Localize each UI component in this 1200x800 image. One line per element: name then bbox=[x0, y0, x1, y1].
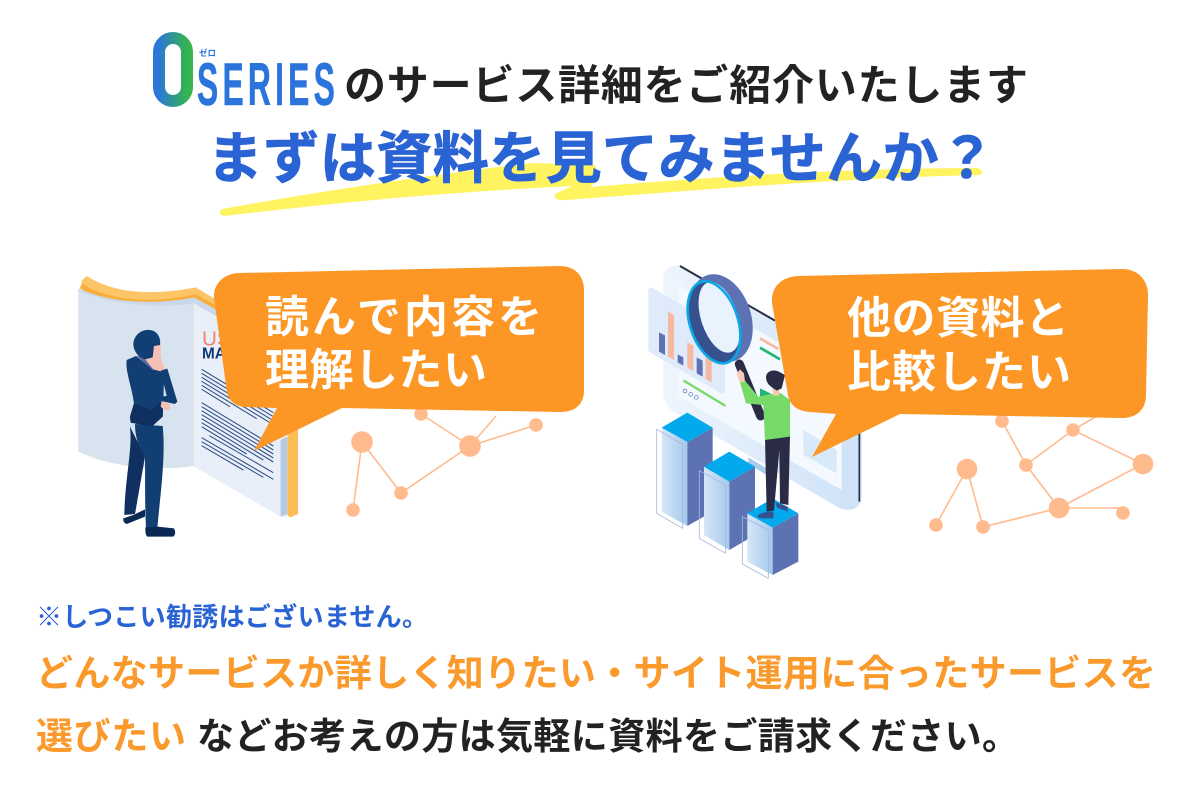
illustration: person reading a book: US bbox=[202, 327, 231, 350]
illustration: person with magnifying glass bbox=[648, 265, 1152, 578]
book text lines bbox=[202, 369, 273, 479]
callout: left: 読んで内容を bbox=[265, 293, 542, 342]
column 3 bbox=[747, 513, 773, 575]
heading highlight stroke bbox=[220, 163, 982, 216]
man bbox=[124, 427, 145, 515]
column 1 bbox=[662, 428, 687, 526]
body text: などお考えの方は気軽に資料をご請求ください。 bbox=[197, 716, 1019, 757]
network: left bbox=[347, 408, 542, 516]
logo: 0 SERIES bbox=[159, 38, 339, 119]
illustration: person reading a book bbox=[78, 276, 542, 537]
book bbox=[82, 276, 298, 517]
callout: right: 比較したい bbox=[847, 348, 1071, 397]
person bbox=[765, 436, 790, 512]
heading: まずは資料を見てみませんか？ bbox=[207, 127, 995, 190]
column 2 bbox=[704, 467, 729, 550]
title line: のサービス詳細をご紹介いたします bbox=[344, 62, 1028, 109]
body text: どんなサービスか詳しく知りたい・サイト運用に合ったサービスを bbox=[36, 653, 1156, 694]
magnifier bbox=[739, 364, 761, 416]
monitor bbox=[663, 265, 862, 510]
callout: left: 理解したい bbox=[265, 346, 487, 395]
network: right bbox=[930, 396, 1152, 533]
chart panel bbox=[648, 288, 725, 394]
body text: 選びたい bbox=[36, 716, 186, 757]
note: ※しつこい勧誘はございません。 bbox=[36, 602, 428, 632]
illustration: person reading a book: MAN bbox=[202, 346, 237, 363]
callout: right: 他の資料と bbox=[847, 294, 1069, 343]
body text bbox=[36, 653, 1156, 757]
callout: left bbox=[214, 266, 584, 451]
logo: 0 SERIES: ゼロ bbox=[199, 48, 216, 58]
logo: 0 SERIES: SERIES bbox=[197, 53, 339, 119]
callout: right bbox=[772, 269, 1148, 457]
